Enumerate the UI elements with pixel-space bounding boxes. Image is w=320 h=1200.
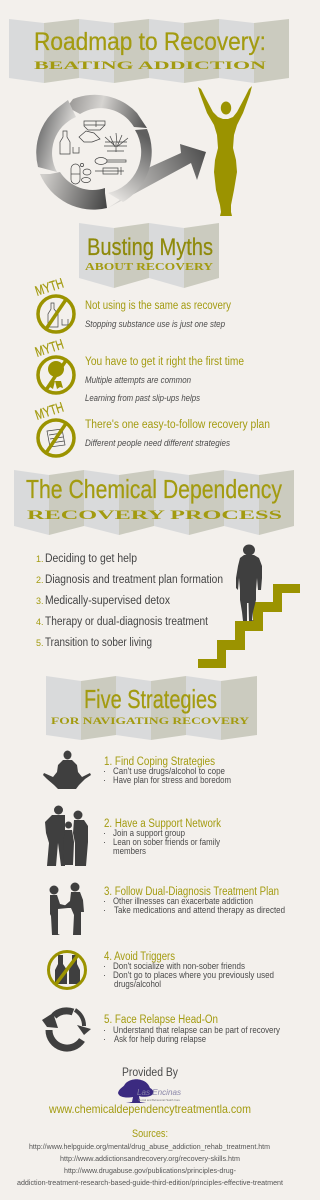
strategy points bbox=[103, 828, 220, 856]
recovery process steps: Transition to sober living bbox=[45, 637, 152, 649]
strategy points: Join a support group bbox=[113, 828, 185, 838]
recovery process steps: 2. bbox=[36, 575, 44, 585]
icon: no first-place ribbon bbox=[38, 357, 74, 393]
recovery process steps bbox=[36, 553, 223, 649]
icon: cycle arrows bbox=[42, 1010, 91, 1048]
strategy points bbox=[103, 1025, 280, 1044]
logo: las encinas: Las Encinas bbox=[137, 1088, 181, 1097]
strategy points: members bbox=[113, 846, 146, 856]
myth label: MYTH bbox=[33, 399, 66, 423]
recovery process steps: 1. bbox=[36, 554, 44, 564]
website url: www.chemicaldependencytreatmentla.com bbox=[48, 1102, 251, 1116]
strategy heading: 4. Avoid Triggers bbox=[104, 951, 175, 963]
icon: family bbox=[45, 806, 88, 866]
sources list: addiction-treatment-research-based-guide-third-edition/principles-effective-treatment bbox=[17, 1180, 283, 1187]
strategy points: · bbox=[103, 961, 106, 971]
figure: person with raised arms bbox=[198, 86, 252, 216]
myth 3 bbox=[33, 399, 270, 456]
subheading: RECOVERY PROCESS bbox=[27, 507, 282, 522]
myth detail: Stopping substance use is just one step bbox=[85, 319, 225, 329]
strategy heading: 1. Find Coping Strategies bbox=[104, 756, 215, 768]
strategy points: · bbox=[103, 775, 106, 785]
recovery process steps: Therapy or dual-diagnosis treatment bbox=[45, 616, 209, 628]
myth 2 bbox=[33, 336, 244, 403]
myth label: MYTH bbox=[33, 275, 66, 299]
strategy points: · bbox=[103, 766, 106, 776]
heading: Busting Myths bbox=[87, 234, 213, 261]
provided by: Provided By bbox=[122, 1067, 178, 1079]
strategy points: · bbox=[103, 970, 106, 980]
recovery process steps: 5. bbox=[36, 638, 44, 648]
recovery process steps: Diagnosis and treatment plan formation bbox=[45, 574, 223, 586]
strategy points: Ask for help during relapse bbox=[114, 1034, 206, 1044]
icon: handshake bbox=[50, 882, 84, 935]
strategy points: · bbox=[103, 1034, 106, 1044]
myth detail: Different people need different strategies bbox=[85, 438, 230, 448]
banner: roadmap to recovery bbox=[9, 19, 289, 83]
strategy points: · bbox=[103, 896, 106, 906]
subheading: FOR NAVIGATING RECOVERY bbox=[51, 717, 249, 727]
icon: meditation bbox=[43, 750, 91, 789]
icon: no single plan bbox=[38, 420, 74, 456]
strategy points: · bbox=[103, 1025, 106, 1035]
strategy 4 bbox=[48, 951, 274, 989]
strategy points bbox=[103, 896, 285, 915]
arrow: breaking out of cycle bbox=[108, 144, 206, 208]
myth 1 bbox=[33, 275, 231, 332]
recovery process steps: Medically-supervised detox bbox=[45, 595, 170, 607]
strategy 5 bbox=[42, 1010, 280, 1048]
myth details bbox=[85, 375, 200, 403]
strategy points: Understand that relapse can be part of recovery bbox=[113, 1025, 280, 1035]
icon: no alcohol bbox=[38, 296, 74, 332]
recovery process steps: Deciding to get help bbox=[45, 553, 137, 565]
myth details: Multiple attempts are common bbox=[85, 375, 191, 385]
icon: no bottles bbox=[48, 952, 86, 988]
figure: man climbing stairs bbox=[236, 544, 262, 621]
strategy heading: 5. Face Relapse Head-On bbox=[104, 1014, 218, 1026]
logo: las encinas: Mental and Behavioral Health Care bbox=[138, 1099, 181, 1102]
strategy points bbox=[103, 766, 231, 785]
logo: las encinas bbox=[118, 1079, 181, 1103]
strategy points: Lean on sober friends or family bbox=[113, 837, 220, 847]
sources list: http://www.drugabuse.gov/publications/principles-drug- bbox=[64, 1168, 237, 1175]
sources heading: Sources: bbox=[132, 1128, 168, 1140]
strategy points: Have plan for stress and boredom bbox=[113, 775, 231, 785]
sources list bbox=[17, 1144, 283, 1187]
banner: five strategies bbox=[46, 676, 257, 740]
strategy points: · bbox=[103, 828, 106, 838]
myth heading: There's one easy-to-follow recovery plan bbox=[85, 419, 270, 431]
myth heading: Not using is the same as recovery bbox=[85, 300, 231, 312]
subheading: ABOUT RECOVERY bbox=[85, 262, 214, 273]
strategy points bbox=[103, 961, 274, 989]
strategy 3 bbox=[50, 882, 285, 935]
cycle of addiction graphic bbox=[36, 95, 206, 210]
banner: chemical dependency recovery process bbox=[14, 470, 294, 535]
heading: Five Strategies bbox=[84, 684, 217, 714]
strategy points: drugs/alcohol bbox=[114, 979, 161, 989]
strategy points: Can't use drugs/alcohol to cope bbox=[113, 766, 225, 776]
myth details: Learning from past slip-ups helps bbox=[85, 393, 200, 403]
sources list: http://www.helpguide.org/mental/drug_abuse_addiction_rehab_treatment.htm bbox=[29, 1144, 270, 1151]
strategy points: · bbox=[103, 905, 106, 915]
sources list: http://www.addictionsandrecovery.org/recovery-skills.htm bbox=[60, 1156, 240, 1163]
myth label: MYTH bbox=[33, 336, 66, 360]
title: Roadmap to Recovery: bbox=[34, 28, 266, 56]
strategy heading: 2. Have a Support Network bbox=[104, 818, 221, 830]
subtitle: BEATING ADDICTION bbox=[34, 58, 267, 72]
strategy points: Other illnesses can exacerbate addiction bbox=[113, 896, 253, 906]
myth heading: You have to get it right the first time bbox=[85, 356, 244, 368]
strategy points: Don't go to places where you previously used bbox=[113, 970, 274, 980]
strategy points: Don't socialize with non-sober friends bbox=[113, 961, 245, 971]
strategy 2 bbox=[45, 806, 221, 866]
recovery process steps: 3. bbox=[36, 596, 44, 606]
banner: busting myths bbox=[79, 223, 219, 288]
stairs bbox=[198, 584, 300, 668]
circular arrows bbox=[36, 95, 152, 210]
strategy points: · bbox=[103, 837, 106, 847]
drug icons bbox=[60, 121, 128, 184]
strategy 1 bbox=[43, 750, 231, 789]
recovery process steps: 4. bbox=[36, 617, 44, 627]
